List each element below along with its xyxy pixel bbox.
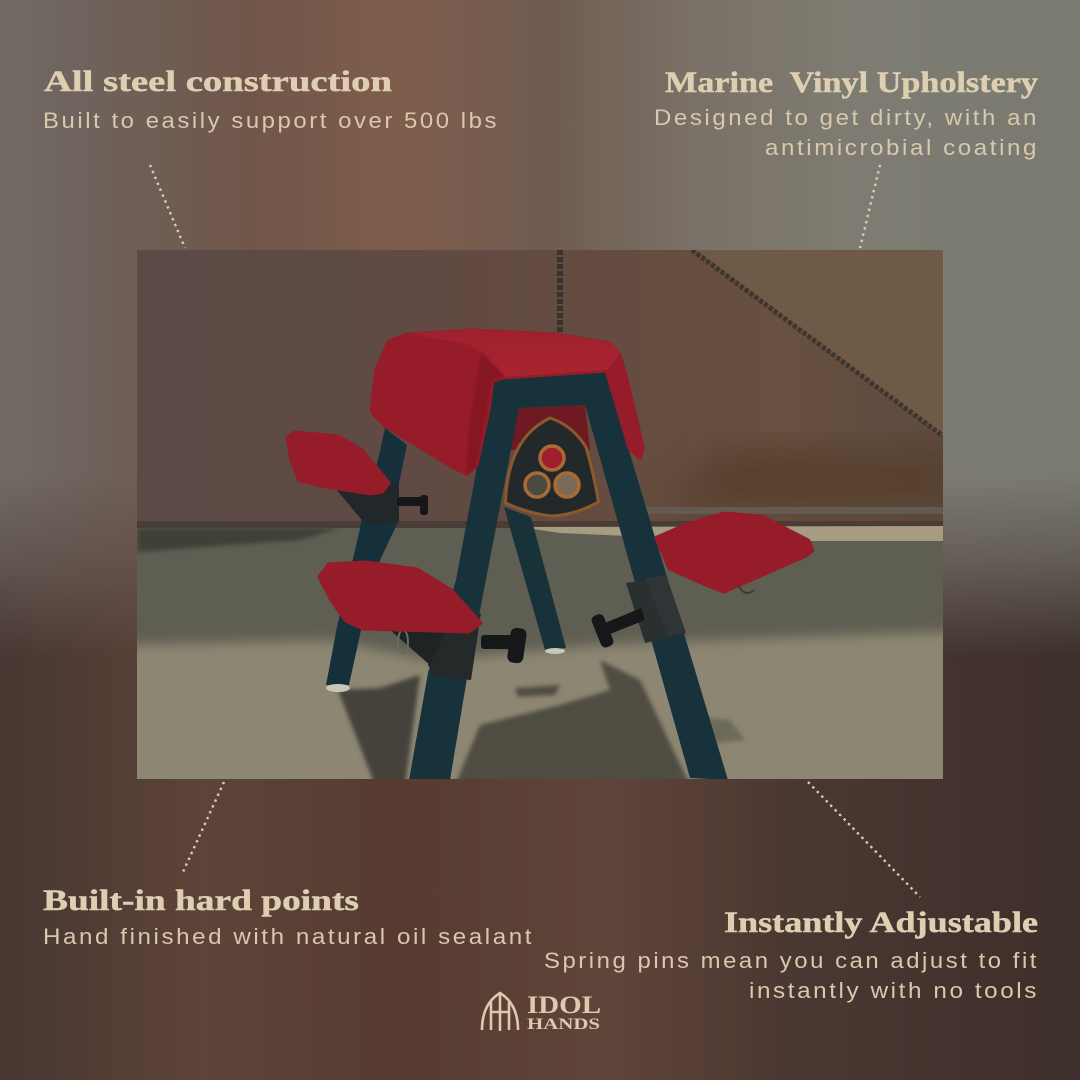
callout: all steel construction — [43, 65, 499, 133]
description: Built to easily support over 500 lbs — [43, 108, 499, 133]
description: Spring pins mean you can adjust to fit — [544, 948, 1039, 973]
crest emblem — [506, 418, 598, 516]
wordmark — [527, 992, 601, 1033]
right knee pad — [657, 514, 812, 593]
spring pin knobs — [397, 495, 645, 664]
heading: Marine Vinyl Upholstery — [665, 66, 1038, 99]
description: instantly with no tools — [749, 978, 1039, 1003]
bench rear legs — [326, 428, 566, 692]
heading: Instantly Adjustable — [724, 906, 1038, 939]
description — [544, 948, 1039, 1003]
wordmark: IDOL — [527, 992, 601, 1019]
photo backdrop: steel wall — [137, 250, 960, 535]
left rear knee pad — [288, 433, 388, 493]
description — [654, 105, 1039, 160]
red pad underside behind frame — [510, 405, 590, 450]
description: Hand finished with natural oil sealant — [43, 924, 534, 949]
callout: marine vinyl upholstery — [654, 66, 1039, 160]
callout: instantly adjustable — [544, 906, 1039, 1003]
description: antimicrobial coating — [765, 135, 1039, 160]
left front knee pad — [320, 563, 480, 631]
heading: All steel construction — [44, 65, 392, 98]
pointer line — [150, 165, 185, 248]
description: Designed to get dirty, with an — [654, 105, 1039, 130]
wordmark: HANDS — [527, 1016, 600, 1033]
heading: Built-in hard points — [43, 884, 359, 917]
top seat pad — [372, 329, 642, 476]
bench front A-frame — [390, 371, 728, 780]
photo floor — [137, 526, 943, 779]
pointer line — [860, 165, 880, 248]
icon: gothic arch — [482, 992, 518, 1031]
pointer line — [183, 782, 224, 872]
product photo: bench in workshop — [137, 250, 943, 779]
logo: Idol Hands — [482, 992, 601, 1033]
pointer line — [808, 782, 920, 897]
callout: built-in hard points — [43, 884, 534, 949]
